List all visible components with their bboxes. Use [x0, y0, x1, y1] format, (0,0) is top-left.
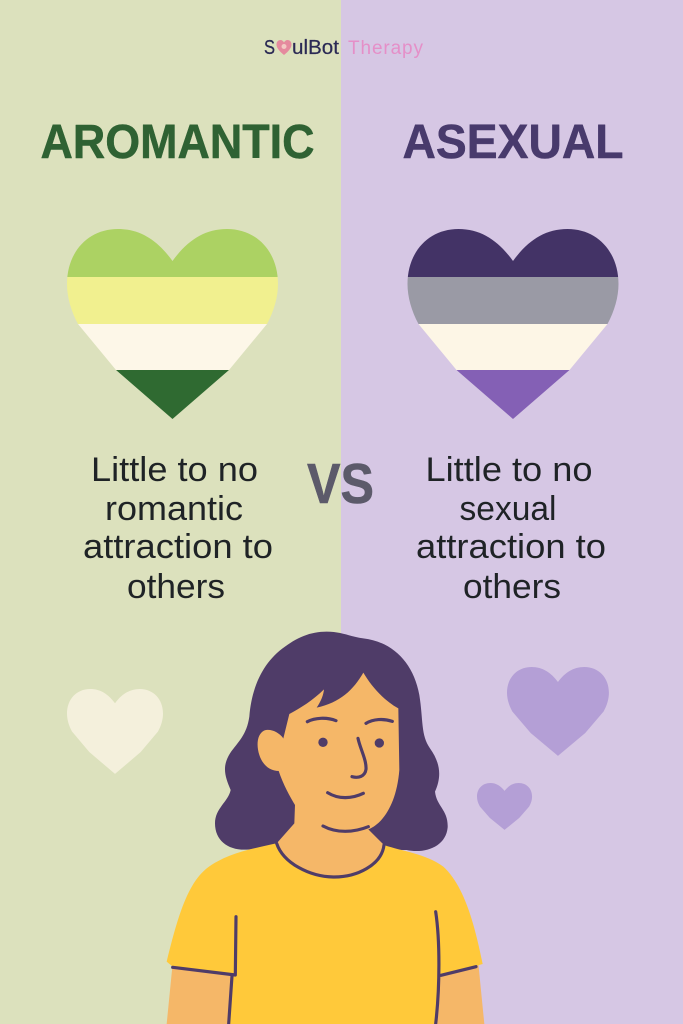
text: aromantic definition: attraction to — [83, 528, 273, 566]
heading: aromantic: AROMANTIC — [40, 115, 314, 169]
icon: asexual flag heart — [400, 225, 626, 422]
text: asexual definition: others — [463, 568, 561, 606]
panel: aromantic background — [0, 0, 341, 1024]
icon: aromantic flag heart — [60, 225, 285, 422]
linework: face and shirt details — [173, 718, 476, 1024]
brand logo: ulBot — [292, 37, 339, 59]
brand logo: Therapy — [348, 38, 424, 59]
text: asexual definition: attraction to — [416, 528, 606, 566]
heading: asexual: ASEXUAL — [402, 115, 624, 169]
text: asexual definition — [416, 451, 606, 606]
eyes — [318, 738, 328, 747]
ear — [258, 730, 287, 771]
brand logo: S — [264, 37, 275, 59]
text: aromantic definition: Little to no — [91, 451, 258, 489]
hair — [215, 632, 448, 851]
icon: logo heart — [276, 40, 292, 55]
icon: large purple heart — [507, 667, 609, 756]
label: VS: VS — [307, 452, 374, 516]
icon: cream heart — [67, 689, 163, 774]
text: asexual definition: sexual — [460, 490, 556, 528]
text: aromantic definition: romantic — [105, 490, 243, 528]
illustration: person — [167, 632, 484, 1024]
icon: small purple heart — [477, 783, 532, 830]
brand logo — [264, 37, 424, 59]
text: aromantic definition: others — [127, 568, 225, 606]
text: aromantic definition — [83, 451, 273, 606]
arms — [167, 963, 484, 1024]
shirt — [167, 843, 483, 1024]
neck and face — [277, 673, 399, 877]
panel: asexual background — [341, 0, 683, 1024]
text: asexual definition: Little to no — [426, 451, 592, 489]
